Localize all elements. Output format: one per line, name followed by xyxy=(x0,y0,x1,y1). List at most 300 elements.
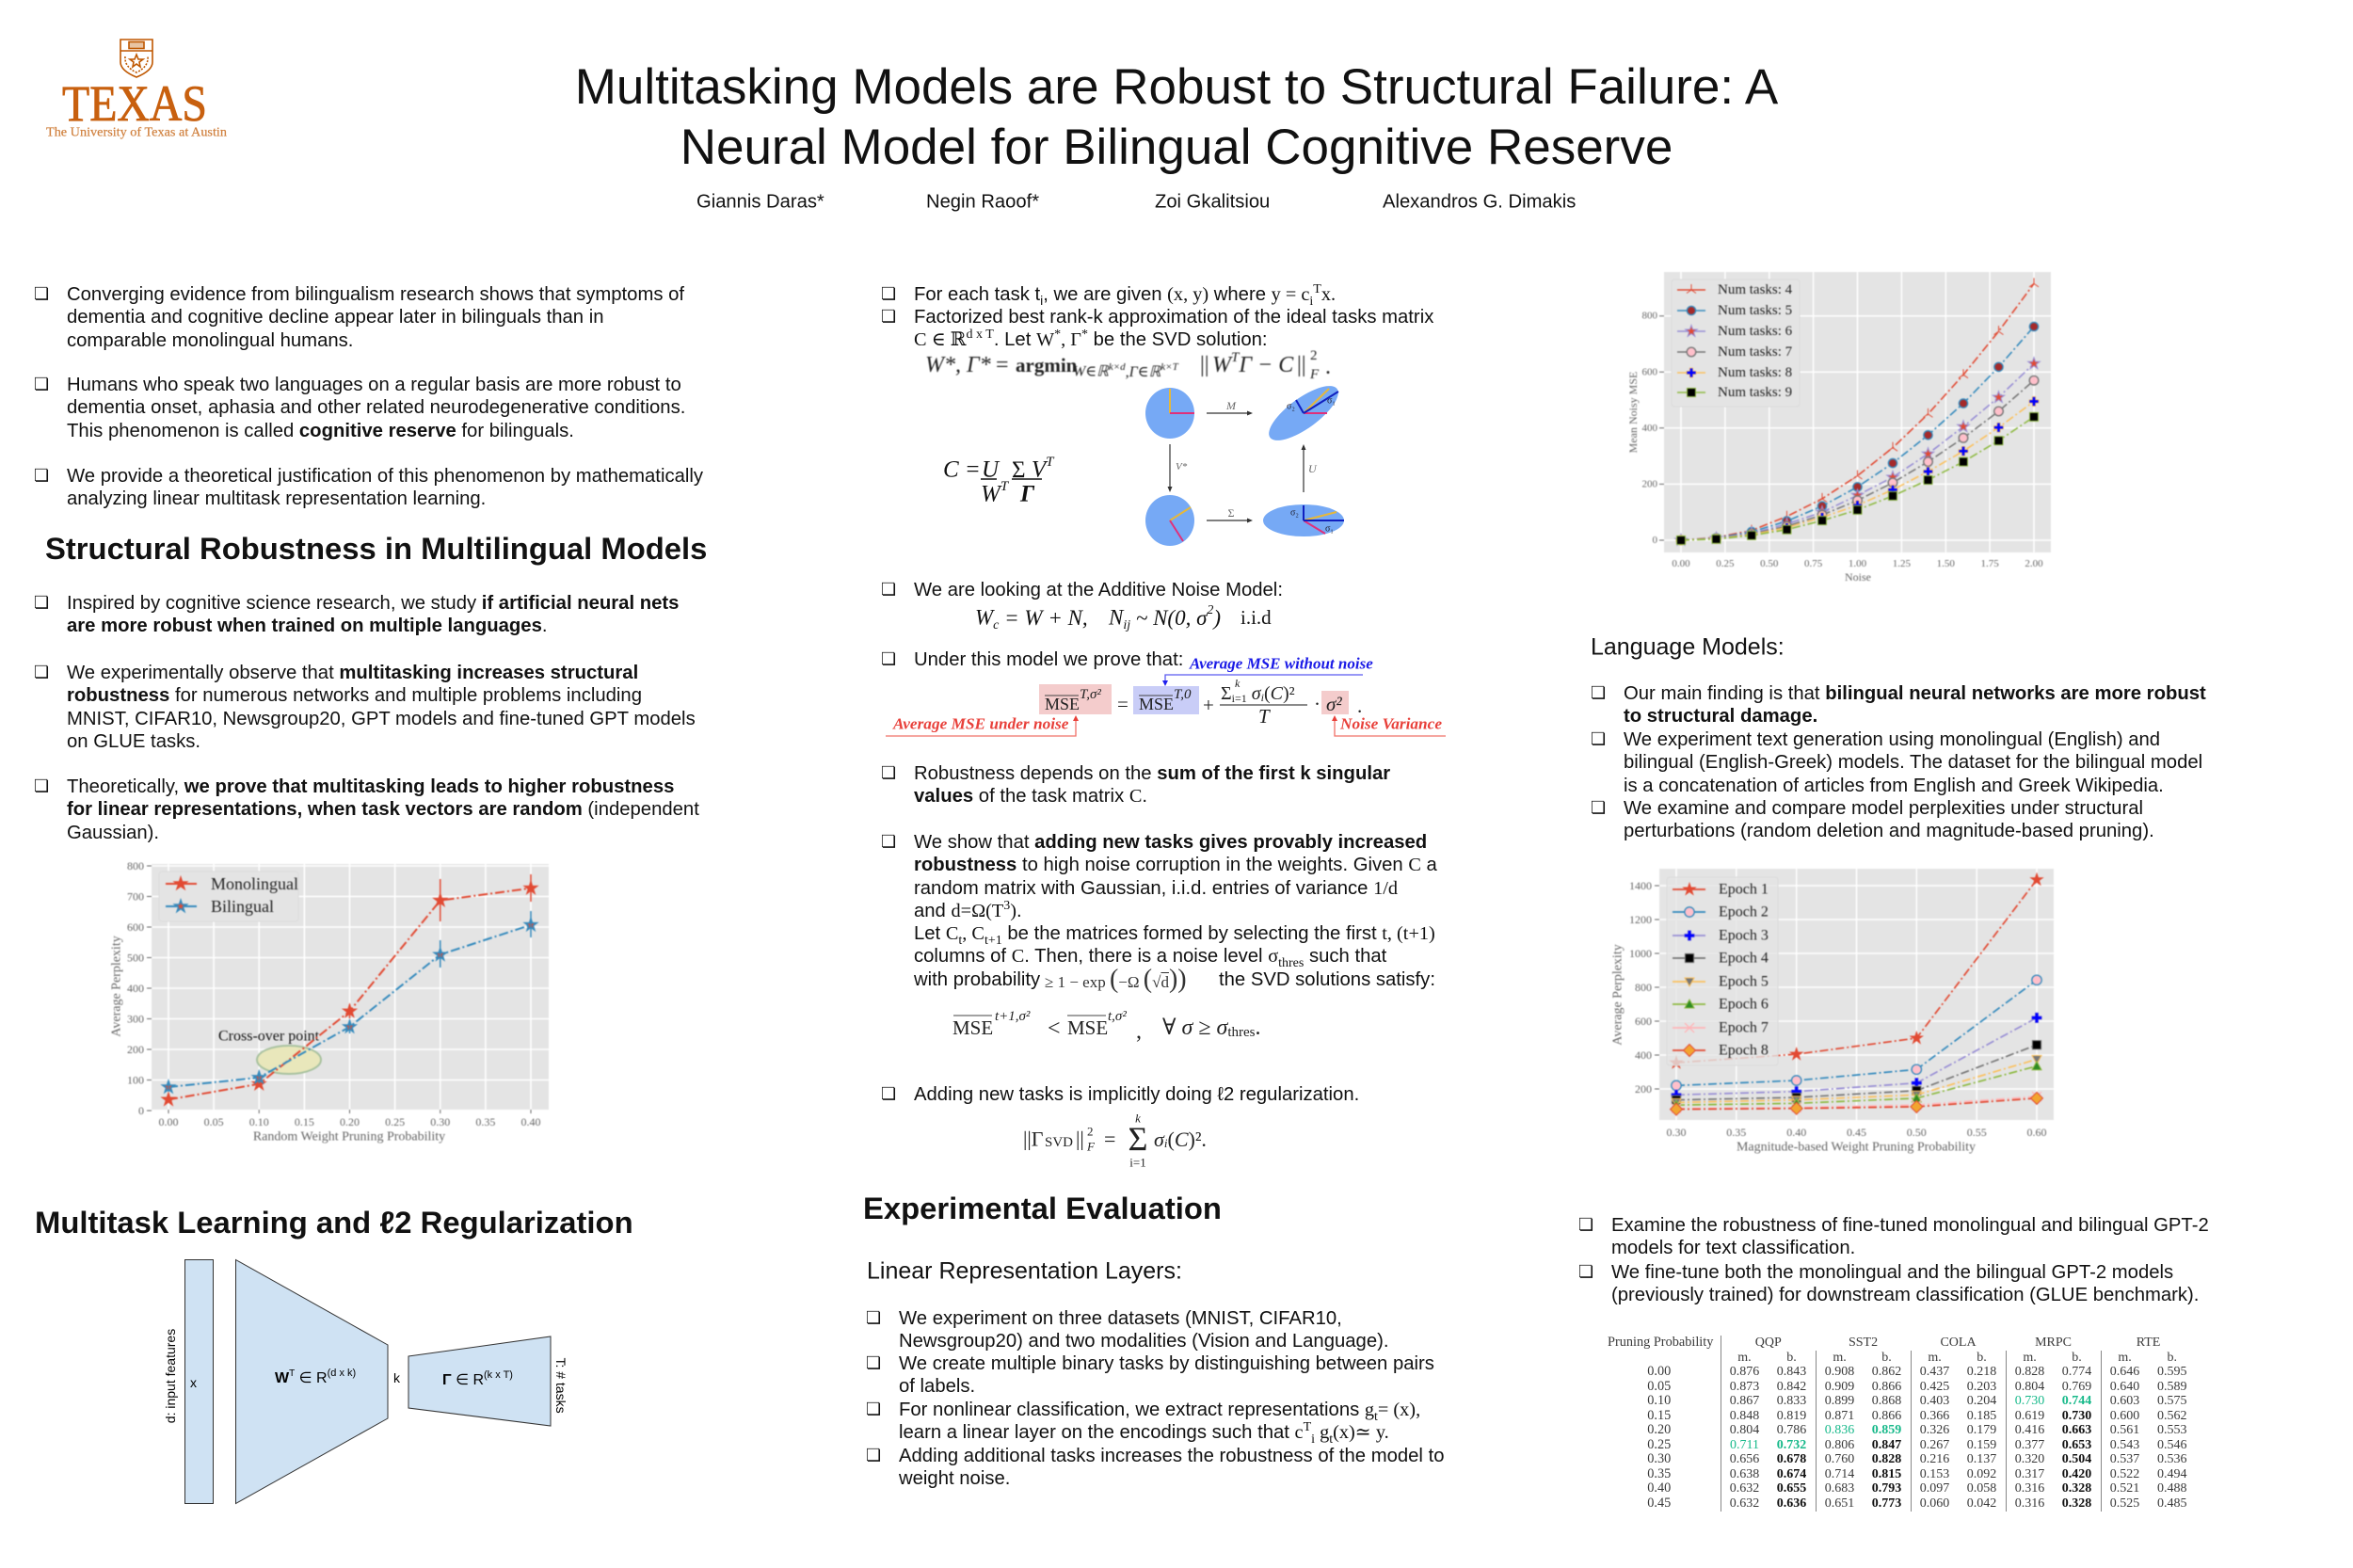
text block: GLUE benchmark: (previously trained) for downstream classification (GLUE benchmark). xyxy=(1611,1285,2199,1305)
table: GLUE results by pruning probability: 0.425 xyxy=(1920,1380,1949,1394)
diagram: SVD geometry: σ₂ xyxy=(1290,508,1299,518)
table: GLUE results by pruning probability: 0.562 xyxy=(2157,1409,2187,1423)
formula: MSE decomposition with annotations: ( xyxy=(1264,683,1271,704)
legend: Num tasks: 9 xyxy=(1718,385,1792,400)
formula: SVD solution: F xyxy=(1309,367,1320,382)
chart: perplexity vs magnitude pruning by epoch: 1200 xyxy=(1629,913,1652,926)
text block: text generation xyxy=(1591,729,2202,796)
text block: main finding xyxy=(1591,683,2206,727)
text block: new tasks theorem: We show that adding new tasks gives provably increased xyxy=(914,832,1427,853)
table: GLUE results by pruning probability: 0.862 xyxy=(1872,1365,1901,1379)
table: GLUE results by pruning probability: 0.773 xyxy=(1872,1496,1901,1511)
table: GLUE results by pruning probability: 0.655 xyxy=(1777,1481,1806,1496)
table: GLUE results by pruning probability: 0.760 xyxy=(1825,1452,1854,1466)
chart: perplexity vs magnitude pruning by epoch: 0.60 xyxy=(2027,1126,2046,1139)
table: GLUE results by pruning probability: 0.804 xyxy=(1730,1423,1759,1437)
series: num tasks 6 xyxy=(1681,363,2034,540)
chart: perplexity vs random weight pruning: 100 xyxy=(127,1073,144,1086)
formula: Gamma SVD norm: i=1 xyxy=(1129,1156,1146,1169)
table: GLUE results by pruning probability: 0.546 xyxy=(2157,1438,2187,1452)
table: GLUE results by pruning probability: m. xyxy=(1833,1351,1847,1365)
highlight: noisy MSE xyxy=(1039,684,1112,714)
text block: datasets: We experiment on three datasets (MNIST, CIFAR10, xyxy=(899,1308,1342,1329)
diagram: SVD geometry: Σ xyxy=(1228,506,1235,520)
author: Giannis Daras* xyxy=(696,191,824,212)
text block: fine-tuned GPT-2: Examine the robustness of fine-tuned monolingual and bilingual GPT-2 xyxy=(1611,1215,2209,1236)
formula: MSE decomposition with annotations: k xyxy=(1235,677,1241,690)
table: GLUE results by pruning probability: 0.871 xyxy=(1825,1409,1854,1423)
text block: perplexity comparison: We examine and compare model perplexities under structural xyxy=(1624,798,2143,819)
text: ❏ xyxy=(881,832,896,852)
text: ❏ xyxy=(34,776,49,796)
formula: MSE decomposition with annotations: Σ xyxy=(1221,683,1232,704)
chart: perplexity vs random weight pruning: 0.40 xyxy=(521,1115,540,1128)
text block: cognitive reserve: This phenomenon is called cognitive reserve for bilinguals. xyxy=(67,421,574,441)
table: GLUE results by pruning probability: 0.437 xyxy=(1920,1365,1949,1379)
text block: text generation: We experiment text generation using monolingual (English) and xyxy=(1624,729,2160,750)
formula: additive noise: W xyxy=(975,606,993,629)
table: GLUE results by pruning probability: 0.859 xyxy=(1872,1423,1901,1437)
formula: SVD solution: k×d xyxy=(1109,361,1126,373)
chart: perplexity vs random weight pruning: 0.30 xyxy=(430,1115,450,1128)
series: epoch 5 xyxy=(1676,1060,2037,1102)
chart: perplexity vs magnitude pruning by epoch: Average Perplexity xyxy=(1611,944,1625,1046)
label: average MSE without noise: Average MSE without noise xyxy=(1189,655,1373,672)
table: GLUE results by pruning probability: 0.159 xyxy=(1967,1438,1996,1452)
table: GLUE results by pruning probability: 0.730 xyxy=(2062,1409,2091,1423)
text block: new tasks theorem xyxy=(881,832,1437,994)
table: GLUE results by pruning probability: m. xyxy=(1928,1351,1942,1365)
heading: multitask and l2: Multitask Learning and ℓ2 Regularization xyxy=(35,1205,633,1240)
diagram: multitask network: Γ ∈ R xyxy=(442,1372,484,1387)
legend: Epoch 8 xyxy=(1719,1043,1769,1058)
formula: SVD solution: Γ − C xyxy=(1238,353,1294,377)
table: GLUE results by pruning probability: 0.561 xyxy=(2110,1423,2139,1437)
chart: mean noisy MSE vs noise: Mean Noisy MSE xyxy=(1626,372,1640,453)
table: GLUE results by pruning probability: SST2 xyxy=(1849,1336,1878,1350)
table: GLUE results by pruning probability: 0.774 xyxy=(2062,1365,2091,1379)
formula: additive noise xyxy=(975,602,1272,632)
text block: cognitive reserve xyxy=(34,375,685,441)
text block: regularization: Adding new tasks is implicitly doing ℓ2 regularization. xyxy=(914,1084,1359,1105)
legend: Epoch 2 xyxy=(1719,904,1769,920)
text block: experimental observation: robustness for numerous networks and multiple problems including xyxy=(67,685,642,706)
table: GLUE results by pruning probability: 0.636 xyxy=(1777,1496,1806,1511)
table: GLUE results by pruning probability: 0.522 xyxy=(2110,1467,2139,1481)
table: GLUE results by pruning probability: b. xyxy=(1881,1351,1892,1365)
chart: mean noisy MSE vs noise: 1.00 xyxy=(1849,558,1867,569)
formula: MSE decomposition with annotations: T,0 xyxy=(1174,687,1192,702)
cross-over label: Cross-over point xyxy=(218,1028,320,1045)
diagram: SVD geometry: V* xyxy=(1176,461,1188,472)
formula: C = U Sigma V^T xyxy=(943,455,1055,506)
series: num tasks 7 xyxy=(1681,380,2034,540)
table: GLUE results by pruning probability: 0.848 xyxy=(1730,1409,1759,1423)
diagram: multitask network: ∈ R xyxy=(295,1370,328,1385)
table: GLUE results by pruning probability: 0.203 xyxy=(1967,1380,1996,1394)
chart: mean noisy MSE vs noise: 400 xyxy=(1641,423,1658,434)
legend: Epoch 3 xyxy=(1719,928,1769,943)
table: GLUE results by pruning probability: 0.536 xyxy=(2157,1452,2187,1466)
chart: perplexity vs random weight pruning: 0.10 xyxy=(249,1115,269,1128)
diagram: SVD geometry: σ₁ xyxy=(1325,523,1334,535)
series: epoch 7 xyxy=(1676,1096,2037,1109)
diagram: multitask network: x xyxy=(190,1375,197,1390)
formula: SVD solution: = xyxy=(996,353,1009,377)
label: noise variance: Noise Variance xyxy=(1339,715,1442,732)
heading: structural robustness: Structural Robustness in Multilingual Models xyxy=(45,531,707,565)
formula: SVD solution: . xyxy=(1325,355,1331,379)
formula: MSE inequality: MSE xyxy=(952,1016,993,1039)
chart: mean noisy MSE vs noise: 0.50 xyxy=(1760,558,1779,569)
legend xyxy=(1672,280,1800,407)
text block: experimental observation: MNIST, CIFAR10, Newsgroup20, GPT models and fine-tuned GPT models xyxy=(67,709,696,729)
table: GLUE results by pruning probability: COLA xyxy=(1940,1336,1977,1350)
table: GLUE results by pruning probability: 0.179 xyxy=(1967,1423,1996,1437)
table: GLUE results by pruning probability: 0.10 xyxy=(1647,1393,1671,1408)
legend: Epoch 1 xyxy=(1719,881,1769,898)
formula: MSE decomposition with annotations: MSE xyxy=(1139,695,1174,713)
table: GLUE results by pruning probability: 0.525 xyxy=(2110,1496,2139,1511)
chart: perplexity vs random weight pruning: 0.05 xyxy=(204,1115,224,1128)
formula: MSE inequality: t+1,σ² xyxy=(995,1009,1031,1024)
icon: shield xyxy=(120,40,152,77)
arrows between states xyxy=(1170,413,1304,520)
text block: perplexity comparison xyxy=(1591,798,2154,841)
text block: experimental observation xyxy=(34,663,696,752)
table: GLUE results by pruning probability: 0.909 xyxy=(1825,1380,1854,1394)
table: GLUE results by pruning probability: MRPC xyxy=(2035,1336,2072,1350)
diagram: multitask network: W xyxy=(275,1370,290,1385)
diagram: multitask network: (k x T) xyxy=(484,1369,513,1381)
table: GLUE results by pruning probability: 0.35 xyxy=(1647,1466,1671,1481)
circle before V* xyxy=(1145,388,1194,439)
text block: bilingualism evidence: dementia and cognitive decline appear later in bilinguals than in xyxy=(67,307,604,328)
table: GLUE results by pruning probability: 0.537 xyxy=(2110,1452,2139,1466)
table: GLUE results by pruning probability: 0.40 xyxy=(1647,1480,1671,1496)
table: GLUE results by pruning probability: 0.873 xyxy=(1730,1380,1759,1394)
formula: MSE decomposition with annotations: i=1 xyxy=(1232,692,1247,705)
chart: perplexity vs magnitude pruning by epoch: Magnitude-based Weight Pruning Probability xyxy=(1737,1141,1976,1154)
table: GLUE results by pruning probability: 0.600 xyxy=(2110,1409,2139,1423)
table: GLUE results by pruning probability: 0.328 xyxy=(2062,1496,2091,1511)
table: GLUE results by pruning probability: 0.640 xyxy=(2110,1380,2139,1394)
chart: mean noisy MSE vs noise: 800 xyxy=(1641,311,1658,322)
circle after V* xyxy=(1145,495,1194,546)
formula: additive noise: N xyxy=(1109,606,1123,629)
text block: robustness dependence xyxy=(881,763,1390,807)
formula: C = U Sigma V^T: Σ V xyxy=(1012,457,1046,482)
text block: cognitive reserve: Humans who speak two languages on a regular basis are more robust to xyxy=(67,375,681,395)
text block: new tasks theorem: robustness to high noise corruption in the weights. Given C a xyxy=(914,855,1437,875)
text block: theoretical result: Gaussian). xyxy=(67,823,159,843)
table: GLUE results by pruning probability: 0.786 xyxy=(1777,1423,1806,1437)
formula: MSE inequality: ∀ σ ≥ σ xyxy=(1162,1016,1227,1040)
text block: robustness dependence: Robustness depends on the sum of the first k singular xyxy=(914,763,1390,784)
wordmark caption: The University of Texas at Austin xyxy=(46,126,227,139)
table: GLUE results by pruning probability: RTE xyxy=(2137,1336,2160,1350)
table: GLUE results by pruning probability: 0.267 xyxy=(1920,1438,1949,1452)
table: GLUE results by pruning probability: 0.842 xyxy=(1777,1380,1806,1394)
text block: theoretical result xyxy=(34,776,699,843)
chart: mean noisy MSE vs noise: 200 xyxy=(1641,478,1658,489)
table: GLUE results by pruning probability: 0.769 xyxy=(2062,1380,2091,1394)
chart: perplexity vs random weight pruning: Average Perplexity xyxy=(109,936,124,1037)
subheading: language models: Language Models: xyxy=(1591,633,1785,660)
table: GLUE results by pruning probability: 0.485 xyxy=(2157,1496,2187,1511)
formula: C = U Sigma V^T: T xyxy=(1000,479,1010,494)
chart: perplexity vs magnitude pruning by epoch: 600 xyxy=(1635,1015,1652,1028)
text block: GLUE benchmark: We fine-tune both the monolingual and the bilingual GPT-2 models xyxy=(1611,1262,2173,1283)
text: ❏ xyxy=(34,593,49,613)
chart: mean noisy MSE vs noise: 600 xyxy=(1641,366,1658,377)
table: GLUE results by pruning probability: 0.793 xyxy=(1872,1481,1901,1496)
legend: Num tasks: 8 xyxy=(1718,365,1792,380)
table: GLUE results by pruning probability: 0.674 xyxy=(1777,1467,1806,1481)
table: GLUE results by pruning probability: 0.714 xyxy=(1825,1467,1854,1481)
table: GLUE results by pruning probability: 0.420 xyxy=(2062,1467,2091,1481)
table: GLUE results by pruning probability: 0.20 xyxy=(1647,1422,1671,1437)
formula: additive noise: 2 xyxy=(1207,602,1213,617)
text block: binary tasks: We create multiple binary tasks by distinguishing between pairs xyxy=(899,1353,1434,1374)
legend: Monolingual xyxy=(211,874,298,893)
formula: MSE decomposition with annotations: σ xyxy=(1247,683,1262,704)
formula: MSE inequality: MSE xyxy=(1067,1016,1108,1039)
table: GLUE results by pruning probability: 0.806 xyxy=(1825,1438,1854,1452)
title: Neural Model for Bilingual Cognitive Reserve xyxy=(680,120,1673,175)
text: ❏ xyxy=(1578,1215,1593,1235)
table: GLUE results by pruning probability: 0.899 xyxy=(1825,1394,1854,1408)
table: GLUE results by pruning probability: 0.30 xyxy=(1647,1451,1671,1466)
formula: MSE inequality: < xyxy=(1048,1016,1061,1041)
formula: SVD solution: W∈ℝ xyxy=(1073,363,1109,380)
chart: perplexity vs magnitude pruning by epoch: 400 xyxy=(1635,1048,1652,1062)
formula: Gamma SVD norm xyxy=(1023,1111,1207,1169)
text block: proof intro: Under this model we prove that: xyxy=(914,649,1183,670)
series: epoch 4 xyxy=(1676,1045,2037,1100)
text block: new tasks theorem: Let Ct, Ct+1 be the matrices formed by selecting the first t, (t+1) xyxy=(914,923,1435,948)
diagram: multitask network xyxy=(163,1259,568,1504)
table: GLUE results by pruning probability: m. xyxy=(2023,1351,2037,1365)
highlight: noiseless MSE xyxy=(1133,686,1199,714)
table: GLUE results by pruning probability: 0.504 xyxy=(2062,1452,2091,1466)
formula: SVD solution: T xyxy=(1231,350,1241,365)
formula: SVD solution: || xyxy=(1297,353,1306,377)
text block: main finding: to structural damage. xyxy=(1624,706,1817,727)
text block: new tasks theorem: columns of C. Then, there is a noise level σthres such that xyxy=(914,946,1386,971)
formula: Gamma SVD norm: k xyxy=(1135,1111,1141,1126)
table: GLUE results by pruning probability: QQP xyxy=(1755,1336,1782,1350)
series: epoch 1 xyxy=(1676,880,2037,1063)
formula: C = U Sigma V^T: Γ xyxy=(1019,482,1035,506)
chart: mean noisy MSE vs noise: 2.00 xyxy=(2025,558,2043,569)
chart: mean noisy MSE vs noise: 0.75 xyxy=(1804,558,1823,569)
formula: MSE inequality: . xyxy=(1256,1016,1261,1040)
legend: Epoch 7 xyxy=(1719,1020,1769,1035)
table: GLUE results by pruning probability: 0.711 xyxy=(1730,1438,1759,1452)
table: GLUE results by pruning probability: b. xyxy=(1977,1351,1987,1365)
text block: new tasks theorem: the SVD solutions satisfy: xyxy=(1219,969,1435,990)
legend: Epoch 4 xyxy=(1719,951,1769,966)
encoder W xyxy=(235,1259,388,1504)
table: GLUE results by pruning probability xyxy=(1608,1335,2187,1512)
formula: C = U Sigma V^T: C = xyxy=(943,457,981,482)
formula: additive noise: c xyxy=(993,617,1000,632)
formula: Gamma SVD norm: SVD xyxy=(1045,1135,1073,1150)
text block: theoretical justification: We provide a theoretical justification of this phenomenon by mathematically xyxy=(67,466,703,487)
formula: SVD solution: ,Γ∈ℝ xyxy=(1126,363,1162,380)
text block: main finding: Our main finding is that bilingual neural networks are more robust xyxy=(1624,683,2206,704)
table: GLUE results by pruning probability: 0.042 xyxy=(1967,1496,1996,1511)
text block: bilingualism evidence xyxy=(34,284,685,351)
legend: Epoch 5 xyxy=(1719,973,1769,990)
table: GLUE results by pruning probability: 0.137 xyxy=(1967,1452,1996,1466)
series: epoch 6 xyxy=(1676,1066,2037,1105)
text block: nonlinear classification: learn a linear layer on the encodings such that cTi gt(x)≃ y. xyxy=(899,1421,1389,1447)
chart: perplexity vs random weight pruning: 0.20 xyxy=(340,1115,360,1128)
text block: additive noise: We are looking at the Additive Noise Model: xyxy=(914,580,1283,600)
table: GLUE results by pruning probability: Pruning Probability xyxy=(1608,1335,1713,1350)
diagram: multitask network: (d x k) xyxy=(328,1368,356,1379)
ellipse after M xyxy=(1261,376,1346,450)
diagram: SVD geometry: U xyxy=(1308,462,1318,475)
formula: SVD solution: argmin xyxy=(1016,354,1078,376)
text block: perplexity comparison: perturbations (random deletion and magnitude-based pruning). xyxy=(1624,821,2154,841)
table: GLUE results by pruning probability: 0.25 xyxy=(1647,1437,1671,1452)
author: Alexandros G. Dimakis xyxy=(1383,191,1576,212)
formula: C = U Sigma V^T: W xyxy=(981,482,1000,506)
chart: mean noisy MSE vs noise: 1.25 xyxy=(1893,558,1912,569)
formula: Gamma SVD norm: Σ xyxy=(1128,1120,1147,1158)
text: ❏ xyxy=(34,375,49,394)
formula: Gamma SVD norm: F xyxy=(1086,1139,1096,1154)
legend: Num tasks: 7 xyxy=(1718,344,1793,360)
table: GLUE results by pruning probability: 0.638 xyxy=(1730,1467,1759,1481)
text block: rank-k approximation xyxy=(881,307,1434,350)
diagram: multitask network: k xyxy=(393,1370,401,1385)
table: GLUE results by pruning probability: 0.868 xyxy=(1872,1394,1901,1408)
formula: MSE decomposition with annotations: σ² xyxy=(1326,693,1342,715)
formula: MSE decomposition with annotations: i xyxy=(1261,691,1264,704)
formula: MSE decomposition with annotations: T xyxy=(1258,705,1271,728)
series: bilingual xyxy=(168,925,531,1087)
chart: perplexity vs random weight pruning: 200 xyxy=(127,1043,144,1056)
diagram: SVD geometry xyxy=(1145,376,1346,546)
chart: perplexity vs magnitude pruning by epoch: 800 xyxy=(1635,981,1652,994)
formula: MSE inequality xyxy=(952,1009,1261,1044)
formula: additive noise: = W + N, xyxy=(999,606,1088,629)
chart: mean noisy MSE vs noise: 1.50 xyxy=(1937,558,1955,569)
chart: perplexity vs magnitude pruning by epoch: 0.55 xyxy=(1967,1126,1987,1139)
chart: mean noisy MSE vs noise xyxy=(1626,272,2051,584)
series: epoch 3 xyxy=(1676,1017,2037,1095)
table: GLUE results by pruning probability: 0.494 xyxy=(2157,1467,2187,1481)
chart: perplexity vs random weight pruning: 400 xyxy=(127,982,144,995)
subheading: linear representation layers: Linear Representation Layers: xyxy=(867,1257,1182,1284)
series: num tasks 8 xyxy=(1681,401,2034,540)
text: ❏ xyxy=(881,649,896,669)
text block: task setup: For each task ti, we are given (x, y) where y = ciTx. xyxy=(914,282,1336,309)
chart: perplexity vs magnitude pruning by epoch: 0.40 xyxy=(1786,1126,1806,1139)
chart: perplexity vs random weight pruning: 0.15 xyxy=(295,1115,314,1128)
formula: MSE decomposition with annotations: MSE xyxy=(1045,695,1080,713)
table: GLUE results by pruning probability: 0.595 xyxy=(2157,1365,2187,1379)
table: GLUE results by pruning probability: 0.836 xyxy=(1825,1423,1854,1437)
table: GLUE results by pruning probability: 0.603 xyxy=(2110,1394,2139,1408)
formula: Gamma SVD norm: 2 xyxy=(1087,1124,1094,1139)
text: ❏ xyxy=(881,307,896,327)
table: GLUE results by pruning probability: 0.185 xyxy=(1967,1409,1996,1423)
chart: perplexity vs random weight pruning: 600 xyxy=(127,920,144,934)
formula: MSE decomposition with annotations: T,σ² xyxy=(1080,687,1101,702)
table: GLUE results by pruning probability: 0.804 xyxy=(2015,1380,2044,1394)
chart: mean noisy MSE vs noise: 1.75 xyxy=(1980,558,1999,569)
formula: MSE decomposition with annotations: C)² xyxy=(1271,683,1295,704)
text block: study question: are more robust when trained on multiple languages. xyxy=(67,616,548,636)
text block: nonlinear classification: For nonlinear classification, we extract representations gt= (x), xyxy=(899,1400,1420,1424)
formula: Gamma SVD norm: i xyxy=(1164,1135,1168,1150)
text: ❏ xyxy=(34,663,49,682)
formula: MSE inequality: , xyxy=(1136,1019,1142,1044)
formula: MSE decomposition with annotations: · xyxy=(1314,693,1321,715)
text: ❏ xyxy=(866,1308,881,1328)
text block: experimental observation: We experimentally observe that multitasking increases structural xyxy=(67,663,638,683)
heading: experimental evaluation: Experimental Evaluation xyxy=(863,1191,1222,1225)
diagram: SVD geometry: σ₂ xyxy=(1287,401,1295,412)
table: GLUE results by pruning probability: 0.866 xyxy=(1872,1380,1901,1394)
table: GLUE results by pruning probability: m. xyxy=(2118,1351,2132,1365)
formula: Gamma SVD norm: ( xyxy=(1167,1128,1175,1150)
table: GLUE results by pruning probability: 0.589 xyxy=(2157,1380,2187,1394)
logo: University of Texas at Austin xyxy=(46,40,227,139)
table: GLUE results by pruning probability: 0.678 xyxy=(1777,1452,1806,1466)
table: GLUE results by pruning probability: 0.876 xyxy=(1730,1365,1759,1379)
formula: SVD solution: || xyxy=(1200,353,1209,377)
table: GLUE results by pruning probability: 0.153 xyxy=(1920,1467,1949,1481)
formula: SVD solution xyxy=(925,348,1331,382)
text block: rank-k approximation: Factorized best rank-k approximation of the ideal tasks matrix xyxy=(914,307,1433,328)
table: GLUE results by pruning probability: 0.646 xyxy=(2110,1365,2139,1379)
formula: Gamma SVD norm: || xyxy=(1076,1128,1084,1150)
table: GLUE results by pruning probability: 0.553 xyxy=(2157,1423,2187,1437)
series: epoch 2 xyxy=(1676,980,2037,1085)
text: ❏ xyxy=(34,466,49,486)
text block: bilingualism evidence: Converging evidence from bilingualism research shows that symptoms of xyxy=(67,284,684,305)
series: num tasks 4 xyxy=(1681,283,2034,540)
chart: mean noisy MSE vs noise: Noise xyxy=(1845,570,1871,584)
author: Zoi Gkalitsiou xyxy=(1155,191,1270,212)
table: GLUE results by pruning probability: 0.328 xyxy=(2062,1481,2091,1496)
table: GLUE results by pruning probability: 0.00 xyxy=(1647,1364,1671,1379)
label: average MSE under noise: Average MSE under noise xyxy=(892,715,1069,732)
table: GLUE results by pruning probability: 0.819 xyxy=(1777,1409,1806,1423)
text block: additional tasks: weight noise. xyxy=(899,1468,1010,1489)
text: ❏ xyxy=(1591,683,1606,703)
chart: perplexity vs random weight pruning: 0.35 xyxy=(475,1115,495,1128)
title: Multitasking Models are Robust to Structural Failure: A xyxy=(575,59,1778,115)
chart: perplexity vs magnitude pruning by epoch: 200 xyxy=(1635,1082,1652,1096)
chart: perplexity vs magnitude pruning by epoch: 1400 xyxy=(1629,879,1652,892)
table: GLUE results by pruning probability: 0.521 xyxy=(2110,1481,2139,1496)
series: num tasks 5 xyxy=(1681,327,2034,540)
text: ❏ xyxy=(1591,798,1606,818)
table: GLUE results by pruning probability: 0.316 xyxy=(2015,1496,2044,1511)
table: GLUE results by pruning probability: 0.575 xyxy=(2157,1394,2187,1408)
text: ❏ xyxy=(881,1084,896,1104)
table: GLUE results by pruning probability: 0.416 xyxy=(2015,1423,2044,1437)
formula: MSE decomposition with annotations: + xyxy=(1203,694,1214,716)
series: monolingual xyxy=(168,888,531,1099)
